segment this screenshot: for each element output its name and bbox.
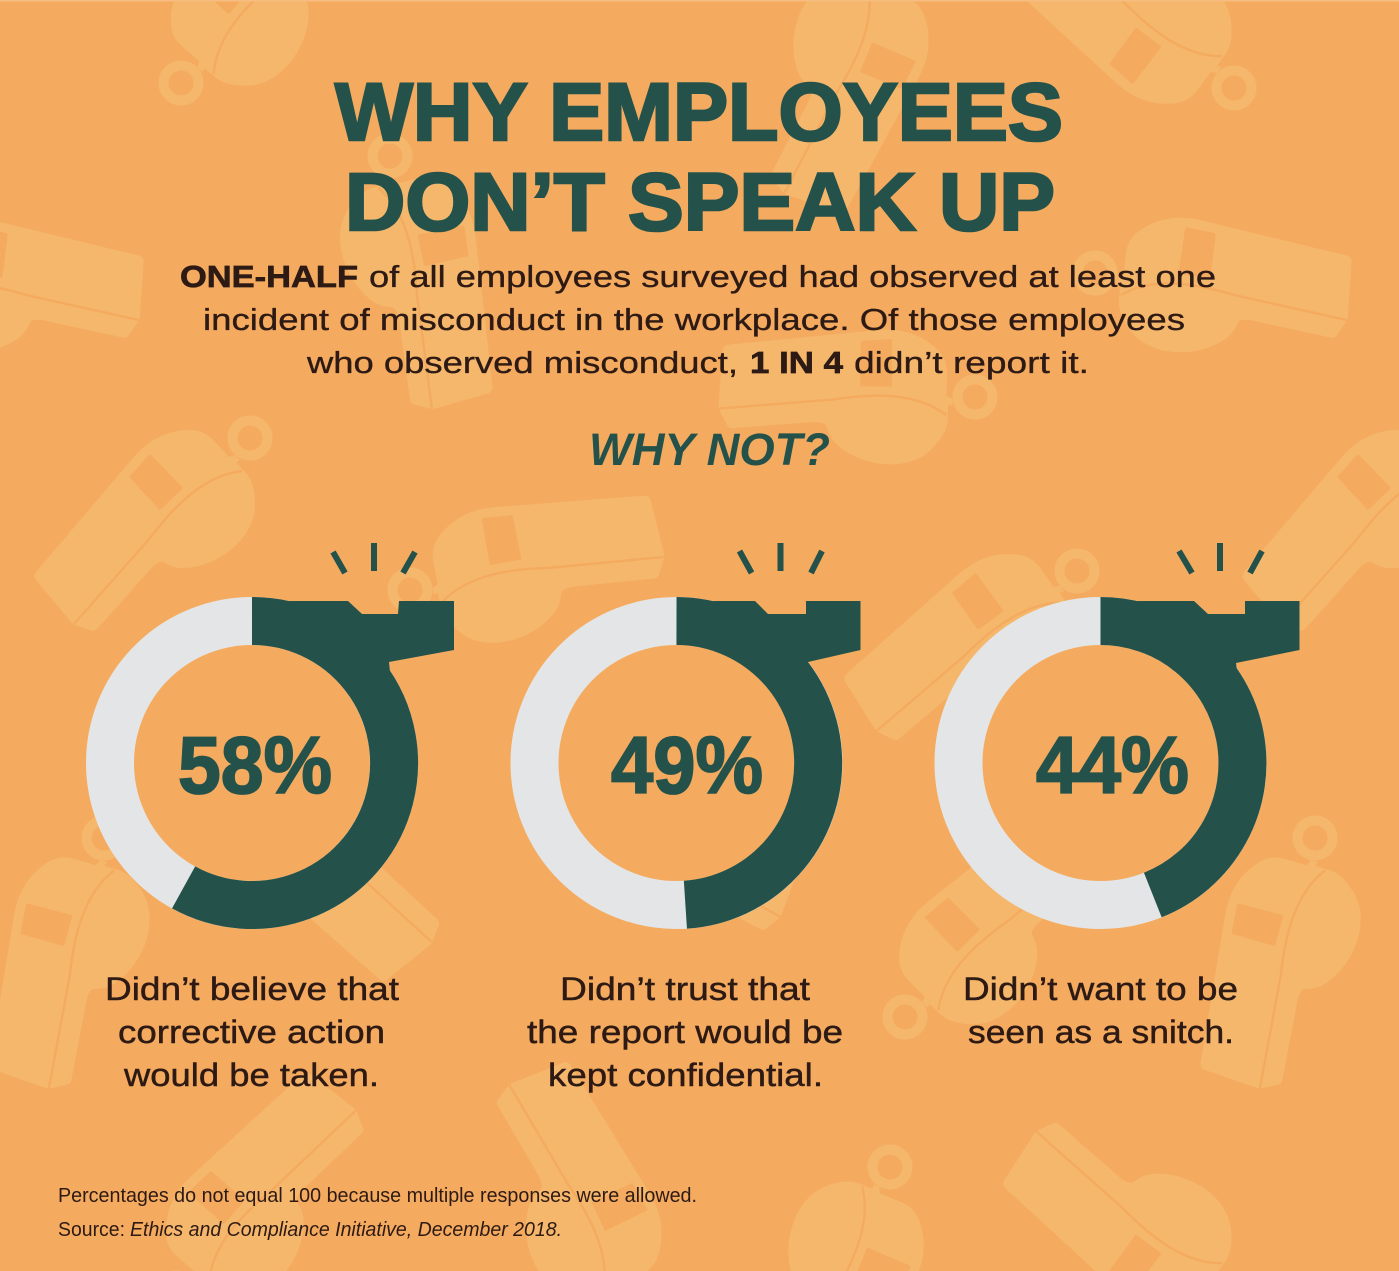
footnote and source <box>58 1185 697 1241</box>
caption: snitch <box>963 971 1238 1050</box>
intro text block: 1 IN 4 <box>750 345 844 380</box>
sound ticks <box>740 543 822 573</box>
donut track <box>958 621 1242 905</box>
donut track <box>110 621 394 905</box>
caption: corrective action: Didn’t believe that <box>105 971 399 1007</box>
caption: corrective action <box>105 971 399 1093</box>
caption: confidentiality: kept confidential. <box>548 1057 823 1093</box>
footnote and source: Percentages do not equal 100 because multiple responses were allowed. <box>58 1185 697 1207</box>
donut value arc <box>184 621 394 905</box>
donut value arc <box>676 621 818 905</box>
caption: confidentiality: Didn’t trust that <box>560 971 810 1007</box>
whistle top <box>1100 601 1300 672</box>
panel: 44 percent donut whistle <box>958 543 1300 905</box>
title: DON’T SPEAK UP <box>345 157 1055 248</box>
title <box>335 67 1063 248</box>
whistle top <box>252 601 454 672</box>
caption: corrective action: corrective action <box>118 1014 385 1050</box>
intro text block: who observed misconduct, <box>306 345 738 380</box>
whistle top <box>676 601 860 663</box>
footnote and source: Ethics and Compliance Initiative, December 2018. <box>130 1219 562 1241</box>
donut track <box>534 621 818 905</box>
caption: confidentiality: the report would be <box>527 1014 843 1050</box>
intro text block: ONE-HALF <box>180 259 358 294</box>
title: WHY EMPLOYEES <box>335 67 1063 158</box>
intro text block <box>180 259 1216 380</box>
footnote and source: Source: <box>58 1219 125 1241</box>
panel: 58 percent donut whistle <box>110 543 454 905</box>
caption: confidentiality <box>527 971 843 1093</box>
caption: corrective action: would be taken. <box>123 1057 379 1093</box>
subheading: WHY NOT? <box>589 424 830 475</box>
caption: snitch: seen as a snitch. <box>968 1014 1234 1050</box>
sound ticks <box>1179 543 1262 573</box>
intro text block: of all employees surveyed had observed at least one <box>369 259 1216 294</box>
intro text block: didn’t report it. <box>854 345 1089 380</box>
panel: 49 percent donut whistle <box>534 543 860 905</box>
intro text block: incident of misconduct in the workplace. Of those employees <box>203 302 1185 337</box>
percentage: 49% <box>611 721 763 811</box>
sound ticks <box>333 543 415 573</box>
percentage: 58% <box>178 721 332 811</box>
donut value arc <box>1100 621 1242 895</box>
percentage: 44% <box>1036 721 1189 811</box>
caption: snitch: Didn’t want to be <box>963 971 1238 1007</box>
